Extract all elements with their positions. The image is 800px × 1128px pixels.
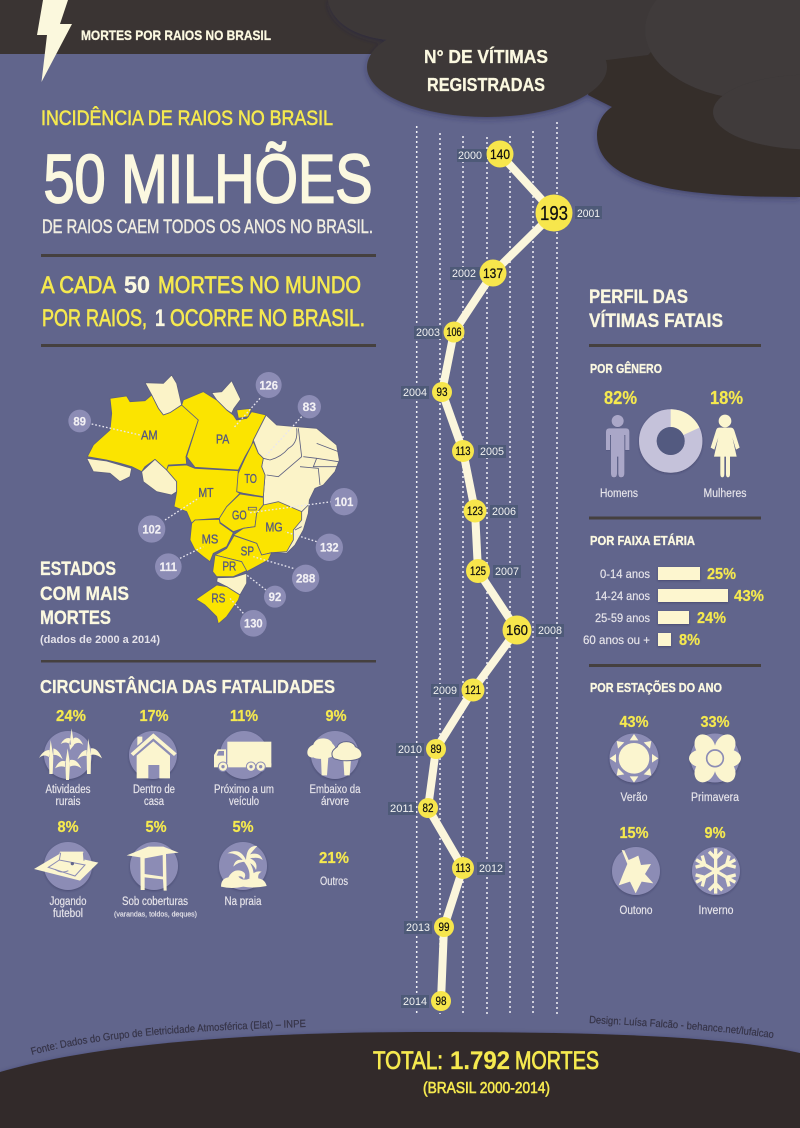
label MT: MT <box>198 486 214 500</box>
icon: football pitch <box>34 852 98 881</box>
age percent 25: 25% <box>707 566 736 583</box>
total <box>373 1047 599 1097</box>
icon: corn field <box>39 728 102 780</box>
label house line 1: Dentro de <box>133 784 175 796</box>
label football line 2: futebol <box>53 908 83 920</box>
bubble 288 <box>292 565 319 592</box>
label winter: Inverno <box>698 905 734 917</box>
profile heading line 1: PERFIL DAS <box>589 287 688 308</box>
icon: flower <box>689 731 741 786</box>
label rural line 1: Atividades <box>46 784 91 796</box>
label RS: RS <box>211 592 225 606</box>
state MG <box>233 502 302 555</box>
upper right petal <box>710 731 740 762</box>
bubble 132 <box>316 534 343 561</box>
panel: circumstances <box>34 676 362 920</box>
label GO: GO <box>232 509 247 523</box>
9 percent: 9% <box>326 708 347 725</box>
node 2011 <box>418 798 438 818</box>
value 137: 137 <box>483 265 503 281</box>
pitch lines <box>48 853 85 876</box>
right petal <box>714 749 741 767</box>
label shelter note: (varandas, toldos, deques) <box>114 910 197 918</box>
line 2 end: OCORRE NO BRASIL. <box>170 305 365 332</box>
icon: man <box>606 415 629 477</box>
dotted guide lines <box>417 122 557 1014</box>
truck wheels <box>218 762 265 771</box>
trend line <box>428 154 554 1001</box>
label summer: Verão <box>620 792 648 804</box>
bubble 101 <box>330 488 358 515</box>
incidence block <box>41 105 373 238</box>
circumstance labels <box>46 784 361 920</box>
big number caption: DE RAIOS CAEM TODOS OS ANOS NO BRASIL. <box>42 216 373 238</box>
value 111: 111 <box>160 561 177 574</box>
bubble 102 <box>138 515 165 543</box>
circle shelter <box>130 842 178 890</box>
bubble 92 <box>264 586 286 608</box>
age label 60+: 60 anos ou + <box>583 633 650 647</box>
bubble 126 <box>256 372 282 398</box>
label beach: Na praia <box>224 896 262 908</box>
label MS: MS <box>202 533 218 547</box>
label MG: MG <box>265 521 283 535</box>
node 2012 <box>452 857 474 879</box>
circle spring <box>690 734 740 782</box>
value 99: 99 <box>438 922 450 934</box>
winter percent: 9% <box>704 825 726 842</box>
24 percent: 24% <box>56 708 86 725</box>
icon: trees <box>307 738 362 775</box>
value 89: 89 <box>430 744 442 756</box>
circle autumn <box>612 847 660 895</box>
node 2000 <box>486 140 514 168</box>
age label 14-24: 14-24 anos <box>595 589 650 603</box>
lower right petal <box>710 755 740 786</box>
state SP <box>215 536 272 572</box>
gender icons <box>606 415 740 477</box>
circumstances heading: CIRCUNSTÂNCIA DAS FATALIDADES <box>40 676 335 697</box>
state MS <box>190 519 233 562</box>
heading line 1: N° DE VÍTIMAS <box>424 46 548 67</box>
year 2010: 2010 <box>398 744 422 756</box>
5 percent shelter: 5% <box>146 819 167 836</box>
gender donut chart <box>648 409 699 464</box>
design credit: Design: Luísa Falcão - behance.net/lufalcao <box>590 1016 774 1038</box>
season labels <box>620 792 740 917</box>
5 percent beach: 5% <box>232 819 254 836</box>
label spring: Primavera <box>691 792 740 804</box>
label rural line 2: rurais <box>56 796 81 808</box>
state PA <box>182 392 266 470</box>
icon: shelter <box>127 847 179 891</box>
value 102: 102 <box>142 523 161 536</box>
number 1: 1 <box>155 305 165 332</box>
men label: Homens <box>600 488 638 500</box>
wheel hubs <box>221 765 262 768</box>
seasons heading: POR ESTAÇÕES DO ANO <box>590 680 722 695</box>
summer percent: 43% <box>620 714 649 731</box>
value 193: 193 <box>540 203 568 225</box>
goal <box>58 852 84 866</box>
11 percent: 11% <box>230 708 258 725</box>
season percentages <box>620 714 730 842</box>
truck cab <box>214 749 226 767</box>
ball arc <box>55 869 68 872</box>
gender heading: POR GÊNERO <box>590 361 662 376</box>
number 50: 50 <box>124 272 150 299</box>
value 82: 82 <box>422 803 434 815</box>
value 93: 93 <box>436 387 448 399</box>
top cloud <box>328 0 700 60</box>
circle football <box>44 842 92 890</box>
world comparison statement <box>41 272 365 332</box>
ball <box>71 862 74 865</box>
node 2002 <box>480 260 506 286</box>
flower centre <box>707 750 723 767</box>
year 2004: 2004 <box>403 387 427 399</box>
node 2013 <box>434 917 454 937</box>
state AC <box>87 458 132 482</box>
leader lines <box>92 398 332 613</box>
age percent 24: 24% <box>697 610 726 627</box>
bar 0-14 <box>658 567 700 580</box>
state RR <box>145 375 182 415</box>
total label: TOTAL: <box>373 1047 443 1075</box>
truck window <box>217 751 224 756</box>
sun disc <box>619 743 649 774</box>
8 percent: 8% <box>58 819 79 836</box>
value 288: 288 <box>296 573 316 586</box>
label SP: SP <box>241 545 254 559</box>
node 2014 <box>431 991 451 1011</box>
state GO <box>219 494 263 532</box>
lower left petal <box>690 755 720 786</box>
label vehicle line 1: Próximo a um <box>214 784 274 796</box>
age label 0-14: 0-14 anos <box>600 567 650 581</box>
value 113 second: 113 <box>456 863 470 875</box>
total unit: MORTES <box>515 1047 599 1075</box>
truck chassis <box>214 763 271 767</box>
profile heading line 2: VÍTIMAS FATAIS <box>589 310 723 332</box>
year 2014: 2014 <box>403 996 427 1008</box>
heading line 2: REGISTRADAS <box>427 74 545 95</box>
label tree line 2: árvore <box>321 796 349 808</box>
palm trunk <box>244 859 254 878</box>
node 2008 <box>502 616 532 644</box>
bubble 89 <box>68 410 91 432</box>
value 101: 101 <box>335 496 354 509</box>
value 125: 125 <box>470 566 486 578</box>
tree trunks <box>321 757 351 775</box>
autumn percent: 15% <box>620 825 649 842</box>
bar 60+ <box>658 633 671 646</box>
chart: victims per year <box>388 122 602 1014</box>
season circles <box>610 734 740 895</box>
men share <box>648 418 694 464</box>
year 2007: 2007 <box>495 566 519 578</box>
label AM: AM <box>141 429 158 443</box>
upper right cloud <box>645 0 800 100</box>
left petal <box>689 749 716 767</box>
value 126: 126 <box>259 379 278 392</box>
icon: truck <box>214 742 271 771</box>
age heading: POR FAIXA ETÁRIA <box>590 533 695 548</box>
men percent: 82% <box>604 388 637 408</box>
circle truck <box>220 731 268 779</box>
incidence heading: INCIDÊNCIA DE RAIOS NO BRASIL <box>41 105 333 130</box>
data period note: (dados de 2000 a 2014) <box>40 634 160 646</box>
value 121: 121 <box>465 685 481 697</box>
states heading <box>40 559 160 646</box>
bottom dark ground <box>0 1032 800 1128</box>
age bar chart <box>583 566 764 649</box>
node 2009 <box>462 678 484 702</box>
node 2001 <box>536 194 572 232</box>
cream states northeast and southeast <box>253 415 339 553</box>
Marajó island <box>237 408 252 418</box>
bar 14-24 <box>658 589 728 602</box>
line 1 end: MORTES NO MUNDO <box>158 272 361 299</box>
label PR: PR <box>222 560 236 574</box>
total period: (BRASIL 2000-2014) <box>423 1080 550 1097</box>
icon: sun <box>610 734 658 783</box>
snowflake vertical arm <box>709 848 722 894</box>
cloud heading <box>424 46 548 95</box>
year 2000: 2000 <box>458 150 482 162</box>
total value: 1.792 <box>450 1047 510 1075</box>
label TO: TO <box>244 472 257 486</box>
value 92: 92 <box>269 591 282 604</box>
right canopy <box>332 742 362 761</box>
year 2001: 2001 <box>577 208 600 220</box>
big number: 50 MILHÕES <box>44 140 372 218</box>
circle beach <box>219 842 267 890</box>
circle summer <box>610 734 658 782</box>
upper left petal <box>690 731 720 762</box>
bubble 83 <box>298 395 321 418</box>
year 2006: 2006 <box>492 506 516 518</box>
value 83: 83 <box>303 401 317 414</box>
snowflake arm right <box>693 854 739 888</box>
bar 25-59 <box>658 611 689 624</box>
central cloud <box>367 17 607 117</box>
circle winter <box>692 847 740 895</box>
snowflake arm left <box>693 854 739 888</box>
year 2002: 2002 <box>452 268 476 280</box>
circle rural <box>44 731 92 779</box>
circle tree <box>311 731 359 779</box>
icon: lightning bolt <box>37 0 72 82</box>
header title: MORTES POR RAIOS NO BRASIL <box>81 27 271 43</box>
data point circles <box>418 140 572 1011</box>
label PA: PA <box>216 432 230 446</box>
age label 25-59: 25-59 anos <box>595 611 650 625</box>
state TO <box>237 442 265 497</box>
icon: house <box>131 733 177 778</box>
value 140: 140 <box>490 146 510 162</box>
icon circles <box>44 731 359 890</box>
season icons <box>610 731 741 894</box>
node 2005 <box>452 440 474 462</box>
map of Brazil <box>68 372 358 637</box>
node 2007 <box>466 559 490 583</box>
icon: snowflake <box>693 848 739 894</box>
label autumn: Outono <box>620 905 652 917</box>
circumstance icons <box>34 728 362 891</box>
year 2012: 2012 <box>479 863 503 875</box>
value 123: 123 <box>467 506 483 518</box>
left canopy <box>307 738 336 759</box>
heading line 2: COM MAIS <box>40 584 129 605</box>
back cloud <box>588 0 800 197</box>
node 2006 <box>464 500 486 522</box>
value 132: 132 <box>320 542 339 555</box>
value 130: 130 <box>244 618 263 631</box>
label house line 2: casa <box>144 796 164 808</box>
state SC <box>217 573 247 595</box>
label shelter: Sob coberturas <box>122 896 188 908</box>
icon: leaf <box>619 850 653 893</box>
label vehicle line 2: veículo <box>229 796 259 808</box>
source credit: Fonte: Dados do Grupo de Eletricidade Atmosférica (Elat) – INPE <box>30 1020 306 1055</box>
line 1 start: A CADA <box>41 272 116 299</box>
palm fronds <box>227 846 263 870</box>
women share <box>671 409 699 435</box>
lower right cloud <box>713 74 800 150</box>
node 2003 <box>444 322 464 342</box>
donut hole <box>657 427 685 455</box>
label football line 1: Jogando <box>50 896 86 908</box>
value 106: 106 <box>446 327 462 339</box>
value 98: 98 <box>436 996 446 1008</box>
year label backgrounds <box>388 149 602 1008</box>
state RO <box>142 459 177 495</box>
age percent 43: 43% <box>734 588 764 605</box>
value 160: 160 <box>506 623 528 639</box>
state AP <box>212 381 241 413</box>
truck body <box>227 742 271 766</box>
storm clouds <box>328 0 800 197</box>
label others: Outros <box>320 876 348 888</box>
node 2004 <box>432 382 452 402</box>
wave <box>221 870 267 888</box>
year 2003: 2003 <box>416 327 440 339</box>
year 2008: 2008 <box>538 625 562 637</box>
value 113: 113 <box>456 446 470 458</box>
bubble 130 <box>240 610 267 637</box>
node 2010 <box>426 739 446 759</box>
heading line 3: MORTES <box>40 608 111 629</box>
top band <box>0 0 420 54</box>
state RS <box>196 585 240 624</box>
northeast state borders <box>248 428 338 530</box>
17 percent: 17% <box>140 708 169 725</box>
label tree line 1: Embaixo da <box>310 784 361 796</box>
state AM <box>87 395 198 472</box>
year 2005: 2005 <box>480 446 504 458</box>
value 89: 89 <box>73 415 87 428</box>
heading line 1: ESTADOS <box>40 559 116 580</box>
age percent 8: 8% <box>679 632 700 649</box>
bubble 111 <box>155 553 182 580</box>
percentages row 1 <box>56 708 349 867</box>
state PR <box>213 555 247 577</box>
icon: woman <box>711 415 740 477</box>
state MT <box>167 465 240 523</box>
women percent: 18% <box>710 388 743 408</box>
circle house <box>129 731 177 779</box>
line 2 start: POR RAIOS, <box>42 305 147 332</box>
21 percent others: 21% <box>319 850 349 867</box>
year 2013: 2013 <box>406 922 430 934</box>
year 2011: 2011 <box>390 803 414 815</box>
year 2009: 2009 <box>433 685 457 697</box>
spring percent: 33% <box>700 714 730 731</box>
women label: Mulheres <box>704 488 747 500</box>
sun rays <box>610 734 658 783</box>
icon: palm on wave <box>221 846 267 888</box>
panel: victim profile <box>583 287 764 917</box>
pitch <box>34 854 98 881</box>
